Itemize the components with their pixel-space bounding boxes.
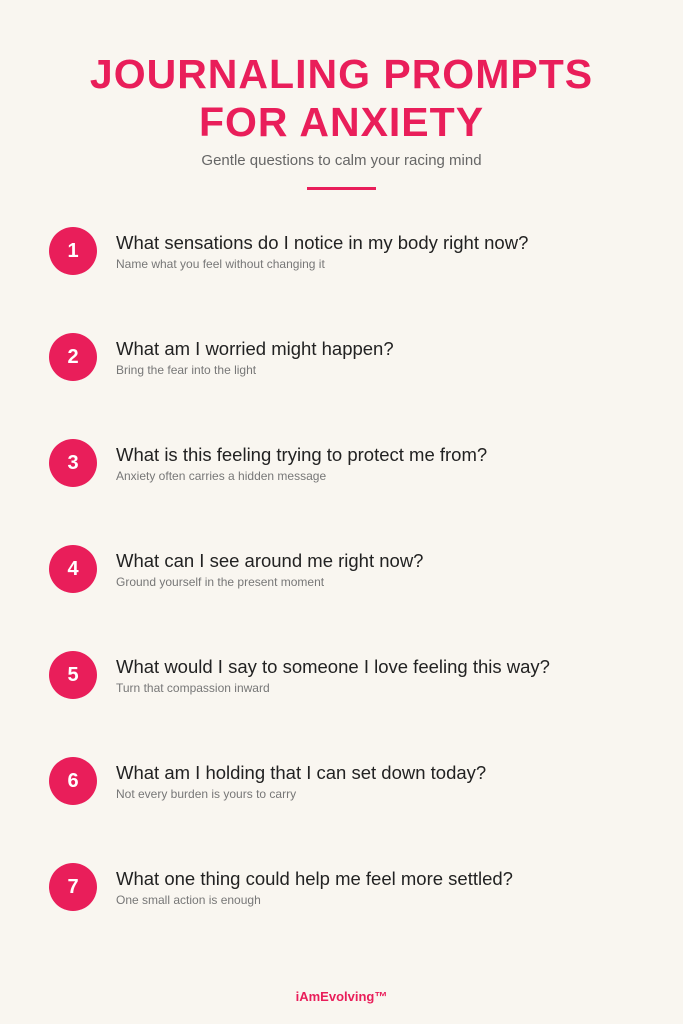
prompt 4: What can I see around me right now? xyxy=(116,550,423,571)
prompt 4 xyxy=(49,545,423,593)
prompt 2: 2 xyxy=(67,346,79,368)
title: JOURNALING PROMPTS xyxy=(90,51,593,97)
prompt 5: Turn that compassion inward xyxy=(116,681,270,695)
prompt 3: 3 xyxy=(67,452,79,474)
prompt 2: What am I worried might happen? xyxy=(116,338,394,359)
prompt 2: Bring the fear into the light xyxy=(116,363,256,377)
prompt 7: 7 xyxy=(67,876,79,898)
subtitle: Gentle questions to calm your racing mind xyxy=(201,152,482,169)
prompt 1 xyxy=(49,227,528,275)
title xyxy=(90,51,593,145)
prompt 7 xyxy=(49,863,513,911)
prompt 1: 1 xyxy=(67,240,79,262)
prompt 5: What would I say to someone I love feeling this way? xyxy=(116,656,550,677)
prompt 6: 6 xyxy=(67,770,79,792)
prompt 6 xyxy=(49,757,486,805)
prompt 6: Not every burden is yours to carry xyxy=(116,787,296,801)
footer brand: iAmEvolving™ xyxy=(296,989,387,1004)
prompt 7: One small action is enough xyxy=(116,893,261,907)
prompt 2 xyxy=(49,333,394,381)
prompt 3: Anxiety often carries a hidden message xyxy=(116,469,326,483)
prompt 3: What is this feeling trying to protect me from? xyxy=(116,444,487,465)
title: FOR ANXIETY xyxy=(199,99,484,145)
prompt 5 xyxy=(49,651,550,699)
prompt 7: What one thing could help me feel more settled? xyxy=(116,868,513,889)
prompt 1: Name what you feel without changing it xyxy=(116,257,325,271)
prompt 3 xyxy=(49,439,487,487)
prompt 5: 5 xyxy=(67,664,79,686)
prompt 4: Ground yourself in the present moment xyxy=(116,575,324,589)
prompt 6: What am I holding that I can set down today? xyxy=(116,762,486,783)
prompt 1: What sensations do I notice in my body right now? xyxy=(116,232,528,253)
prompt 4: 4 xyxy=(67,558,79,580)
